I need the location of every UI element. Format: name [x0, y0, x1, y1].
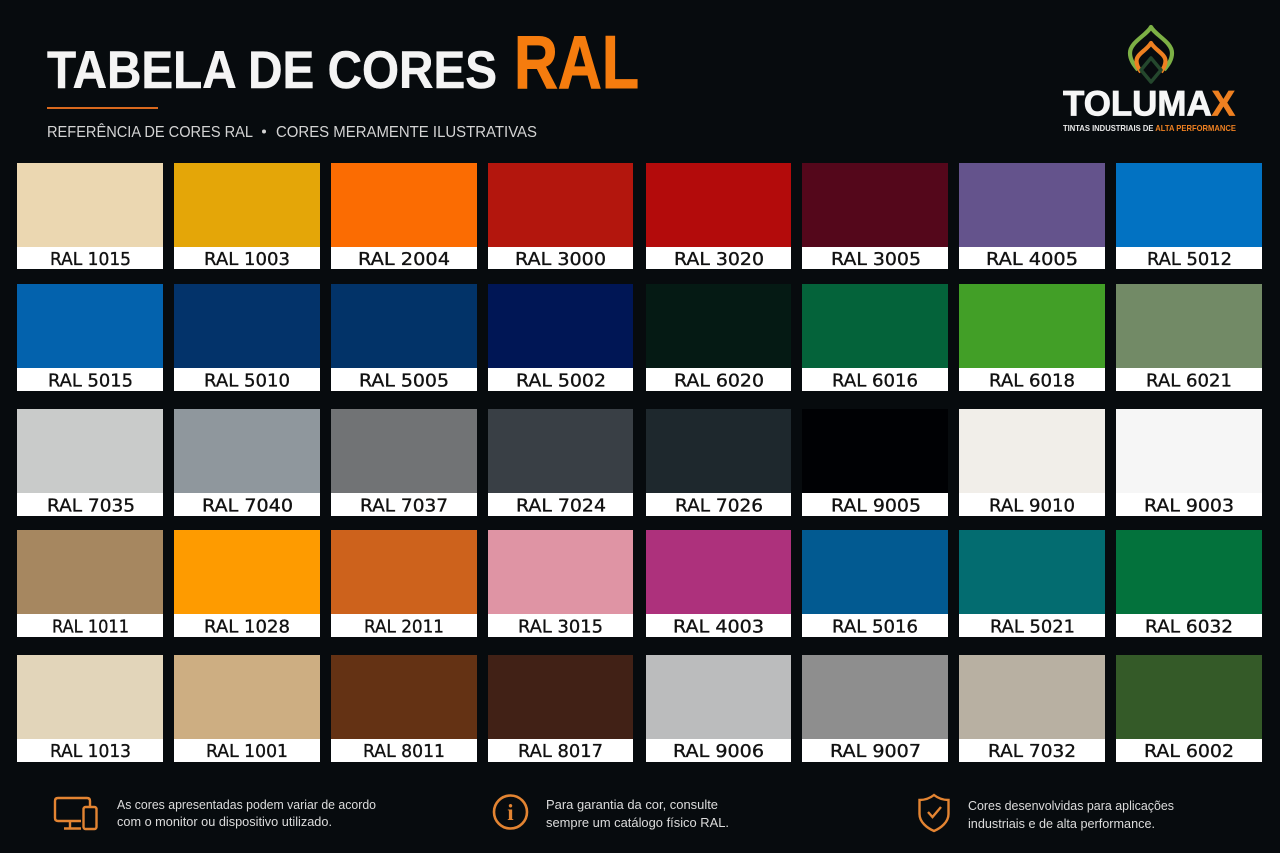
row 2 swatches: RAL 6021	[1146, 370, 1232, 392]
row 4 swatches: RAL 5021	[990, 616, 1075, 638]
row 3 swatches: RAL 7037	[360, 496, 448, 516]
row 4 swatches: RAL 4003	[673, 616, 764, 638]
row 4 swatches: RAL 5016	[832, 616, 918, 638]
row 3 swatches: RAL 7026	[675, 496, 763, 516]
logo tagline: TINTAS INDUSTRIAIS DE ALTA PERFORMANCE	[1063, 123, 1236, 133]
note: catalog: Para garantia da cor, consulte	[546, 798, 718, 812]
row 5 swatches	[17, 655, 1262, 762]
note: monitor: com o monitor ou dispositivo utilizado.	[117, 815, 332, 829]
subtitle: REFERÊNCIA DE CORES RAL	[47, 122, 253, 141]
row 1 swatches: RAL 5012	[1147, 249, 1232, 270]
icon: info	[494, 796, 527, 828]
note: performance: Cores desenvolvidas para aplicações	[968, 799, 1174, 813]
note: catalog: sempre um catálogo físico RAL.	[546, 816, 729, 830]
panel: color grid	[17, 163, 1262, 762]
note: performance	[968, 799, 1174, 831]
title	[47, 20, 639, 104]
icon: info: i	[507, 800, 514, 825]
logo: Tolumax	[1063, 27, 1236, 133]
icon: monitor and phone	[55, 798, 96, 829]
row 5 swatches: RAL 1013	[50, 741, 131, 762]
row 5 swatches: RAL 9007	[830, 741, 921, 762]
icon: logo flame	[1130, 27, 1172, 82]
row 2 swatches	[17, 284, 1262, 392]
row 5 swatches: RAL 8017	[518, 741, 603, 762]
row 2 swatches: RAL 6020	[674, 370, 764, 392]
logo wordmark: TOLUMAX	[1063, 84, 1236, 124]
row 1 swatches	[17, 163, 1262, 270]
row 4 swatches: RAL 6032	[1145, 616, 1233, 638]
row 3 swatches: RAL 7040	[202, 496, 293, 516]
row 3 swatches: RAL 7035	[47, 496, 135, 516]
row 4 swatches: RAL 1028	[204, 616, 290, 638]
note: performance: industriais e de alta performance.	[968, 817, 1155, 831]
row 5 swatches: RAL 9006	[673, 741, 764, 762]
row 3 swatches: RAL 9005	[831, 496, 921, 516]
row 2 swatches: RAL 5015	[48, 370, 133, 392]
row 3 swatches	[17, 409, 1262, 516]
row 2 swatches: RAL 5010	[204, 370, 290, 392]
row 3 swatches: RAL 9003	[1144, 496, 1234, 516]
note: monitor: As cores apresentadas podem variar de acordo	[117, 798, 376, 812]
subtitle	[47, 122, 537, 141]
icon: shield check	[920, 795, 948, 831]
subtitle: CORES MERAMENTE ILUSTRATIVAS	[276, 124, 537, 141]
row 1 swatches: RAL 4005	[986, 249, 1078, 270]
row 4 swatches: RAL 1011	[52, 616, 129, 638]
row 1 swatches: RAL 3000	[515, 249, 606, 270]
row 4 swatches: RAL 3015	[518, 616, 603, 638]
row 5 swatches: RAL 8011	[363, 741, 445, 762]
row 2 swatches: RAL 5002	[516, 370, 606, 392]
row 4 swatches: RAL 2011	[364, 616, 444, 638]
row 1 swatches: RAL 2004	[358, 249, 450, 270]
row 3 swatches: RAL 9010	[989, 496, 1075, 516]
row 5 swatches: RAL 7032	[988, 741, 1076, 762]
title: TABELA DE CORES	[47, 41, 497, 100]
title: RAL	[514, 20, 639, 104]
note: monitor	[117, 798, 376, 829]
row 1 swatches: RAL 1003	[204, 249, 290, 270]
row 1 swatches: RAL 3020	[674, 249, 764, 270]
row 2 swatches: RAL 5005	[359, 370, 449, 392]
row 1 swatches: RAL 3005	[831, 249, 921, 270]
row 2 swatches: RAL 6018	[989, 370, 1075, 392]
row 5 swatches: RAL 1001	[206, 741, 288, 762]
row 5 swatches: RAL 6002	[1144, 741, 1234, 762]
note: catalog	[546, 798, 729, 830]
row 2 swatches: RAL 6016	[832, 370, 918, 392]
row 4 swatches	[17, 530, 1262, 638]
row 3 swatches: RAL 7024	[516, 496, 606, 516]
row 1 swatches: RAL 1015	[50, 249, 131, 270]
